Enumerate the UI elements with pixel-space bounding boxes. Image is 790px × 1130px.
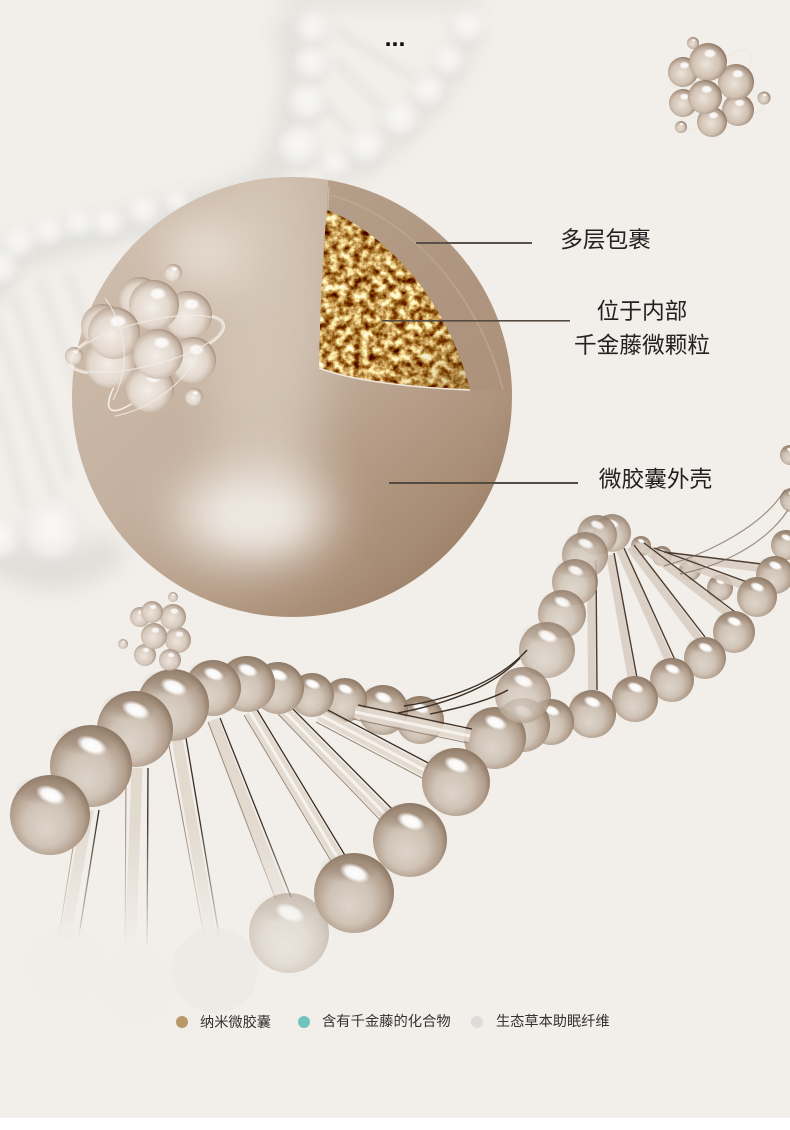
- helix rods front: [244, 704, 472, 866]
- sphere cut-away shell: [319, 180, 512, 392]
- sphere dark lower right rim: [456, 473, 498, 543]
- sphere lower highlight: [174, 467, 330, 563]
- blurred beads: [0, 10, 486, 566]
- legend label: nano capsule: 纳米微胶囊: [200, 1014, 271, 1031]
- helix rods right side: [591, 490, 788, 690]
- label: core particles: 千金藤微颗粒: [574, 332, 710, 358]
- label: multi-layer wrap: 多层包裹: [560, 226, 651, 252]
- atom: left on sphere: [63, 264, 230, 421]
- atom: top right decoration: [663, 37, 770, 140]
- blurred background DNA helix: [0, 0, 486, 573]
- foreground DNA helix: [10, 445, 790, 1025]
- helix front strand beads: [10, 656, 490, 933]
- legend dot: herbal fibre: [471, 1016, 483, 1028]
- legend label: compound: 含有千金藤的化合物: [322, 1013, 451, 1030]
- helix right strand beads: [464, 556, 790, 769]
- microcapsule sphere: [72, 177, 512, 617]
- label: core particles: 位于内部: [597, 298, 687, 324]
- sphere body: [72, 177, 512, 617]
- atom: small above helix: [116, 592, 200, 674]
- helix far strand beads: [323, 445, 790, 744]
- bottom white strip: [0, 1118, 790, 1130]
- label: capsule shell: 微胶囊外壳: [599, 466, 712, 492]
- legend label: herbal fibre: 生态草本助眠纤维: [496, 1014, 610, 1030]
- blurred grey shadow bands: [0, 0, 480, 573]
- sand-coloured core granules: [319, 210, 470, 390]
- legend dot: compound: [298, 1016, 310, 1028]
- leader line: core: [382, 320, 570, 322]
- helix rods fading downward: [59, 718, 291, 960]
- sphere upper highlight: [161, 218, 249, 286]
- sphere light band: [206, 178, 332, 486]
- blurred rods: [0, 30, 425, 510]
- leader line: shell: [416, 242, 532, 244]
- core lower rim highlight: [319, 368, 470, 390]
- shell cut edge shade: [327, 187, 330, 210]
- leader line: outer shell: [389, 482, 578, 484]
- legend dot: nano capsule: [176, 1016, 188, 1028]
- helix rising strand beads: [495, 514, 631, 723]
- helix crossing rods centre: [398, 650, 527, 714]
- helix faded bottom beads: [25, 893, 329, 1025]
- legend: [176, 1013, 610, 1031]
- shell inner layer ring: [330, 195, 503, 390]
- small dots mark: ...: [385, 24, 405, 52]
